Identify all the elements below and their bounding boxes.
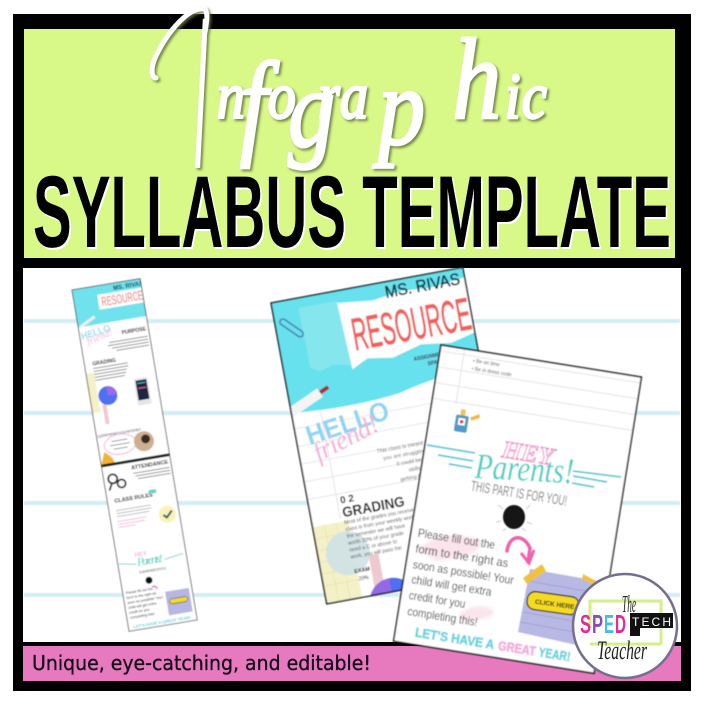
parent instruction paragraph: credit for you [408,588,466,611]
left page: full syllabus preview strip: HEY [134,551,147,559]
laptop outline [590,601,661,644]
parent instruction paragraph [404,526,520,634]
strip fist [145,576,153,584]
strip closing line: LET'S HAVE A GREAT YEAR! [133,615,192,629]
purpose paragraph [376,440,424,482]
contact text: ASSIGNMENTS [413,350,451,363]
closing line: YEAR! [538,644,571,664]
ruled lines [432,345,641,432]
heading: Infographic script: r [318,60,341,133]
strip header [72,279,146,327]
strip parent note: soon as possible! Your [127,595,164,605]
heading: Infographic script: n [217,60,245,133]
lavender note [518,564,598,646]
bullet list [471,358,513,379]
contact text [414,352,440,366]
heading: Infographic script: i [505,60,520,133]
SPED letters: P [592,609,603,639]
SPED letters: S [580,609,591,639]
strip check icon [158,505,176,524]
grading paragraph: Most of the grades you receive [344,507,415,526]
grading paragraph: worth 20% of your grade [348,531,404,547]
paper fold [298,300,352,373]
heading: Infographic script: c [522,60,547,133]
heading: Infographic script: h [452,17,501,144]
grading paragraph: the semester we will have [346,523,406,540]
bullet list: • Be in dress code [471,366,512,379]
friend lettering: friend! [308,408,384,467]
icon: fist [496,505,532,531]
strip divider [98,453,173,468]
pale pink stripe [368,553,384,587]
strip parent note: Please fill out the [125,587,153,595]
heading: Infographic script: g [288,49,335,171]
purpose paragraph: you are struggling [383,448,427,462]
SPED letters: E [604,609,614,639]
grading paragraph [344,508,414,559]
notebook background panel [23,268,681,642]
click here button: CLICK HERE [534,599,575,611]
strip pie chart [97,385,119,406]
grading heading: GRADING [341,494,406,521]
strip magnifier icon [107,472,126,491]
purpose paragraph: skills, or [408,464,429,474]
strip attendance: ATTENDANCE [131,459,169,472]
heading: Infographic script: p [373,47,425,169]
middle page: syllabus cover: 20% [358,575,370,583]
logo badge: The SPED Tech Teacher [573,574,677,678]
strip grading: GRADING [92,358,116,368]
strip parent note: child will get extra [128,601,157,610]
purpose paragraph: getting better [400,472,433,483]
footer bar [23,646,681,681]
pale blue circle [326,530,370,576]
footer caption: Unique, eye-catching, and editable! [32,651,371,675]
heading: Infographic script: f [240,37,280,169]
icon: paper clip [279,318,304,338]
title panel [24,0,675,269]
torn white strip [337,277,477,370]
strip hello: HELLO [80,323,112,343]
icon: bottle [454,408,481,435]
left page: full syllabus preview strip: friend! [85,327,114,348]
icon: marker pen [286,387,332,413]
section number: 0 2 [339,493,355,507]
purpose paragraph: It could be s [396,456,427,468]
strip purpose: PURPOSE [121,326,147,336]
parent instruction paragraph: child will get extra [410,572,493,599]
left page: full syllabus preview strip [69,278,200,632]
pie chart [370,577,404,596]
heading: Infographic script [152,0,547,215]
left page: full syllabus preview strip: THIS PART IS FOR YOU [138,565,167,575]
subtitle: THIS PART IS FOR YOU! [470,478,568,510]
ruled notebook lines [295,403,430,519]
exam label: EXAM [354,566,371,575]
strip parent note: credit for you [129,608,150,615]
teal header band [271,267,484,416]
SPED letters: D [615,609,626,639]
yellow grid sticker [313,521,362,604]
HEY lettering: HEY [499,437,558,471]
strip quote: QUESTIONS? I WOULD LOVE TO HELP [97,427,142,439]
closing line: LET'S HAVE A [414,625,496,652]
bullet list: • Be on time [472,358,500,369]
name: Ms. Rivas: MS. RIVAS [383,269,461,302]
logo badge: The SPED Tech Teacher: The [622,592,636,618]
parent instruction paragraph: form to the right as [414,542,509,570]
grading paragraph: work, you will pass the [350,545,402,561]
TECH block: TECH [632,615,671,629]
front page: parents section [394,345,641,673]
purpose paragraph: This class is meant [376,441,424,455]
middle page: syllabus cover: RESOURCE [348,288,475,360]
strip parent note: form to the right as [126,591,157,600]
parent instruction paragraph: soon as possible! Your [412,557,515,587]
strip parent note [125,588,164,620]
left page: full syllabus preview strip: MS. RIVAS [113,281,144,292]
grading paragraph: need a C or above to [349,539,398,554]
heading: Infographic script: a [340,60,368,133]
SPED letters [580,609,626,639]
parent instruction paragraph: Please fill out the [417,526,496,552]
tape pieces [523,564,546,584]
strip parent note: completing this! [130,612,155,620]
right teal stripes [572,471,621,487]
pale pink hearts [408,529,505,625]
decorative stripes and note [427,445,621,646]
Teacher script: Teacher [597,636,648,665]
closing line [414,625,571,664]
grading paragraph: class is from your weekly work [345,514,415,533]
strip parents heading: Parents! [135,551,164,569]
strip phone [134,377,152,406]
left page: full syllabus preview strip: RESOURCE [100,287,144,309]
contact text: SPACE [427,358,446,367]
arrow [507,538,530,562]
strip portrait [133,430,154,452]
Parents lettering: Parents! [473,446,575,491]
heading: Infographic script: o [268,60,296,133]
strip class rules: CLASS RULES [114,492,154,505]
middle page: syllabus cover [270,267,480,606]
parent instruction paragraph: completing this! [406,604,479,629]
left teal stripes [427,445,475,468]
closing line: GREAT [497,638,537,659]
hello lettering: HELLO [302,395,393,451]
